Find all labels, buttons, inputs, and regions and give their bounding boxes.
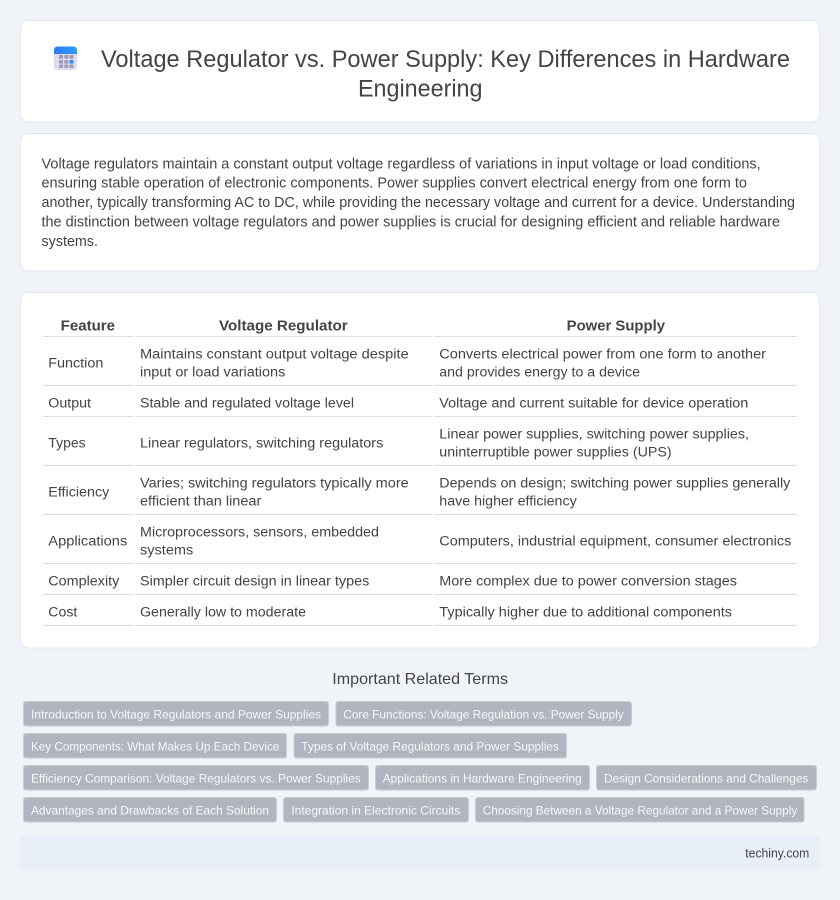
table row: efficiency <box>43 475 797 515</box>
tag <box>24 798 276 822</box>
table row: applications: Computers, industrial equipment, consumer electronics <box>439 533 791 549</box>
table row: efficiency: Efficiency <box>48 484 110 500</box>
table row: applications: Applications <box>48 533 127 549</box>
tag <box>376 766 590 790</box>
table row: output: Stable and regulated voltage level <box>140 395 354 411</box>
title: Engineering <box>358 76 482 102</box>
panel: introduction <box>20 134 820 271</box>
table row: efficiency: Depends on design; switching power supplies generally <box>439 475 791 491</box>
title: Voltage Regulator vs. Power Supply: Key Differences in Hardware <box>101 46 790 73</box>
tag: Advantages and Drawbacks of Each Solution <box>31 803 269 817</box>
tag: Design Considerations and Challenges <box>604 771 808 785</box>
table row: output <box>43 395 797 417</box>
table row: complexity: Complexity <box>48 573 120 589</box>
table row: applications <box>43 524 797 564</box>
text block: introduction paragraph <box>42 156 795 250</box>
title <box>101 46 790 102</box>
table row: types: Linear power supplies, switching power supplies, <box>439 426 749 442</box>
table row: cost: Generally low to moderate <box>140 604 306 620</box>
tag <box>24 766 368 790</box>
tag <box>336 702 632 726</box>
table row: types: Linear regulators, switching regulators <box>140 435 383 451</box>
table row: types: uninterruptible power supplies (UPS) <box>439 444 672 460</box>
table row: output: Voltage and current suitable for device operation <box>439 395 748 411</box>
text block: introduction paragraph: systems. <box>42 234 98 250</box>
text block: introduction paragraph: another, typically transforming AC to DC, while providing the necessary voltage and current for a device. Understanding <box>42 195 795 211</box>
tag: Choosing Between a Voltage Regulator and a Power Supply <box>483 803 797 817</box>
tag: Core Functions: Voltage Regulation vs. Power Supply <box>343 707 624 721</box>
tag: Efficiency Comparison: Voltage Regulators vs. Power Supplies <box>31 771 361 785</box>
table row: function: input or load variations <box>140 364 285 380</box>
table row: complexity: Simpler circuit design in linear types <box>140 573 369 589</box>
table row: complexity <box>43 573 797 595</box>
table header row: Feature <box>61 319 115 335</box>
table header row: Power Supply <box>567 319 666 335</box>
table row: function <box>43 346 797 386</box>
panel: header <box>20 20 820 122</box>
table row: function: and provides energy to a device <box>439 364 640 380</box>
table row: function: Converts electrical power from one form to another <box>439 346 766 362</box>
table row: efficiency: have higher efficiency <box>439 493 578 509</box>
tag <box>476 798 804 822</box>
panel: related term tags <box>24 702 816 822</box>
text block: introduction paragraph: Voltage regulators maintain a constant output voltage regardless of variations in input voltage or load conditions, <box>42 156 761 172</box>
table row: function: Function <box>48 355 103 371</box>
table header row <box>43 319 797 337</box>
tag: Applications in Hardware Engineering <box>383 771 582 785</box>
footer <box>20 836 820 870</box>
table row: cost: Cost <box>48 604 77 620</box>
tag: Types of Voltage Regulators and Power Supplies <box>301 739 559 753</box>
table row: cost: Typically higher due to additional components <box>439 604 732 620</box>
table row: efficiency: efficient than linear <box>140 493 262 509</box>
tag <box>596 766 816 790</box>
tag: Integration in Electronic Circuits <box>291 803 460 817</box>
tag <box>294 734 566 758</box>
tag: Key Components: What Makes Up Each Device <box>31 739 280 753</box>
tag <box>284 798 468 822</box>
text block: introduction paragraph: ensuring stable operation of electronic components. Power supplies convert electrical energy from one form to <box>42 176 747 192</box>
icon: calendar <box>54 46 77 70</box>
table row: efficiency: Varies; switching regulators typically more <box>140 475 409 491</box>
table row: function: Maintains constant output voltage despite <box>140 346 409 362</box>
tag <box>24 734 286 758</box>
table row: applications: Microprocessors, sensors, embedded <box>140 524 379 540</box>
table header row: Voltage Regulator <box>219 319 348 335</box>
table row: types <box>43 426 797 466</box>
tag: Introduction to Voltage Regulators and Power Supplies <box>31 707 321 721</box>
tag <box>24 702 328 726</box>
text block: introduction paragraph: the distinction between voltage regulators and power supplies is crucial for designing efficient and reliable hardware <box>42 215 780 231</box>
table row: types: Types <box>48 435 86 451</box>
table row: cost <box>43 604 797 626</box>
table row: output: Output <box>48 395 91 411</box>
panel: comparison table <box>20 292 820 648</box>
heading: important related terms: Important Related Terms <box>332 671 508 688</box>
footer site name: techiny.com <box>745 846 809 860</box>
table row: applications: systems <box>140 542 193 558</box>
table row: complexity: More complex due to power conversion stages <box>439 573 737 589</box>
